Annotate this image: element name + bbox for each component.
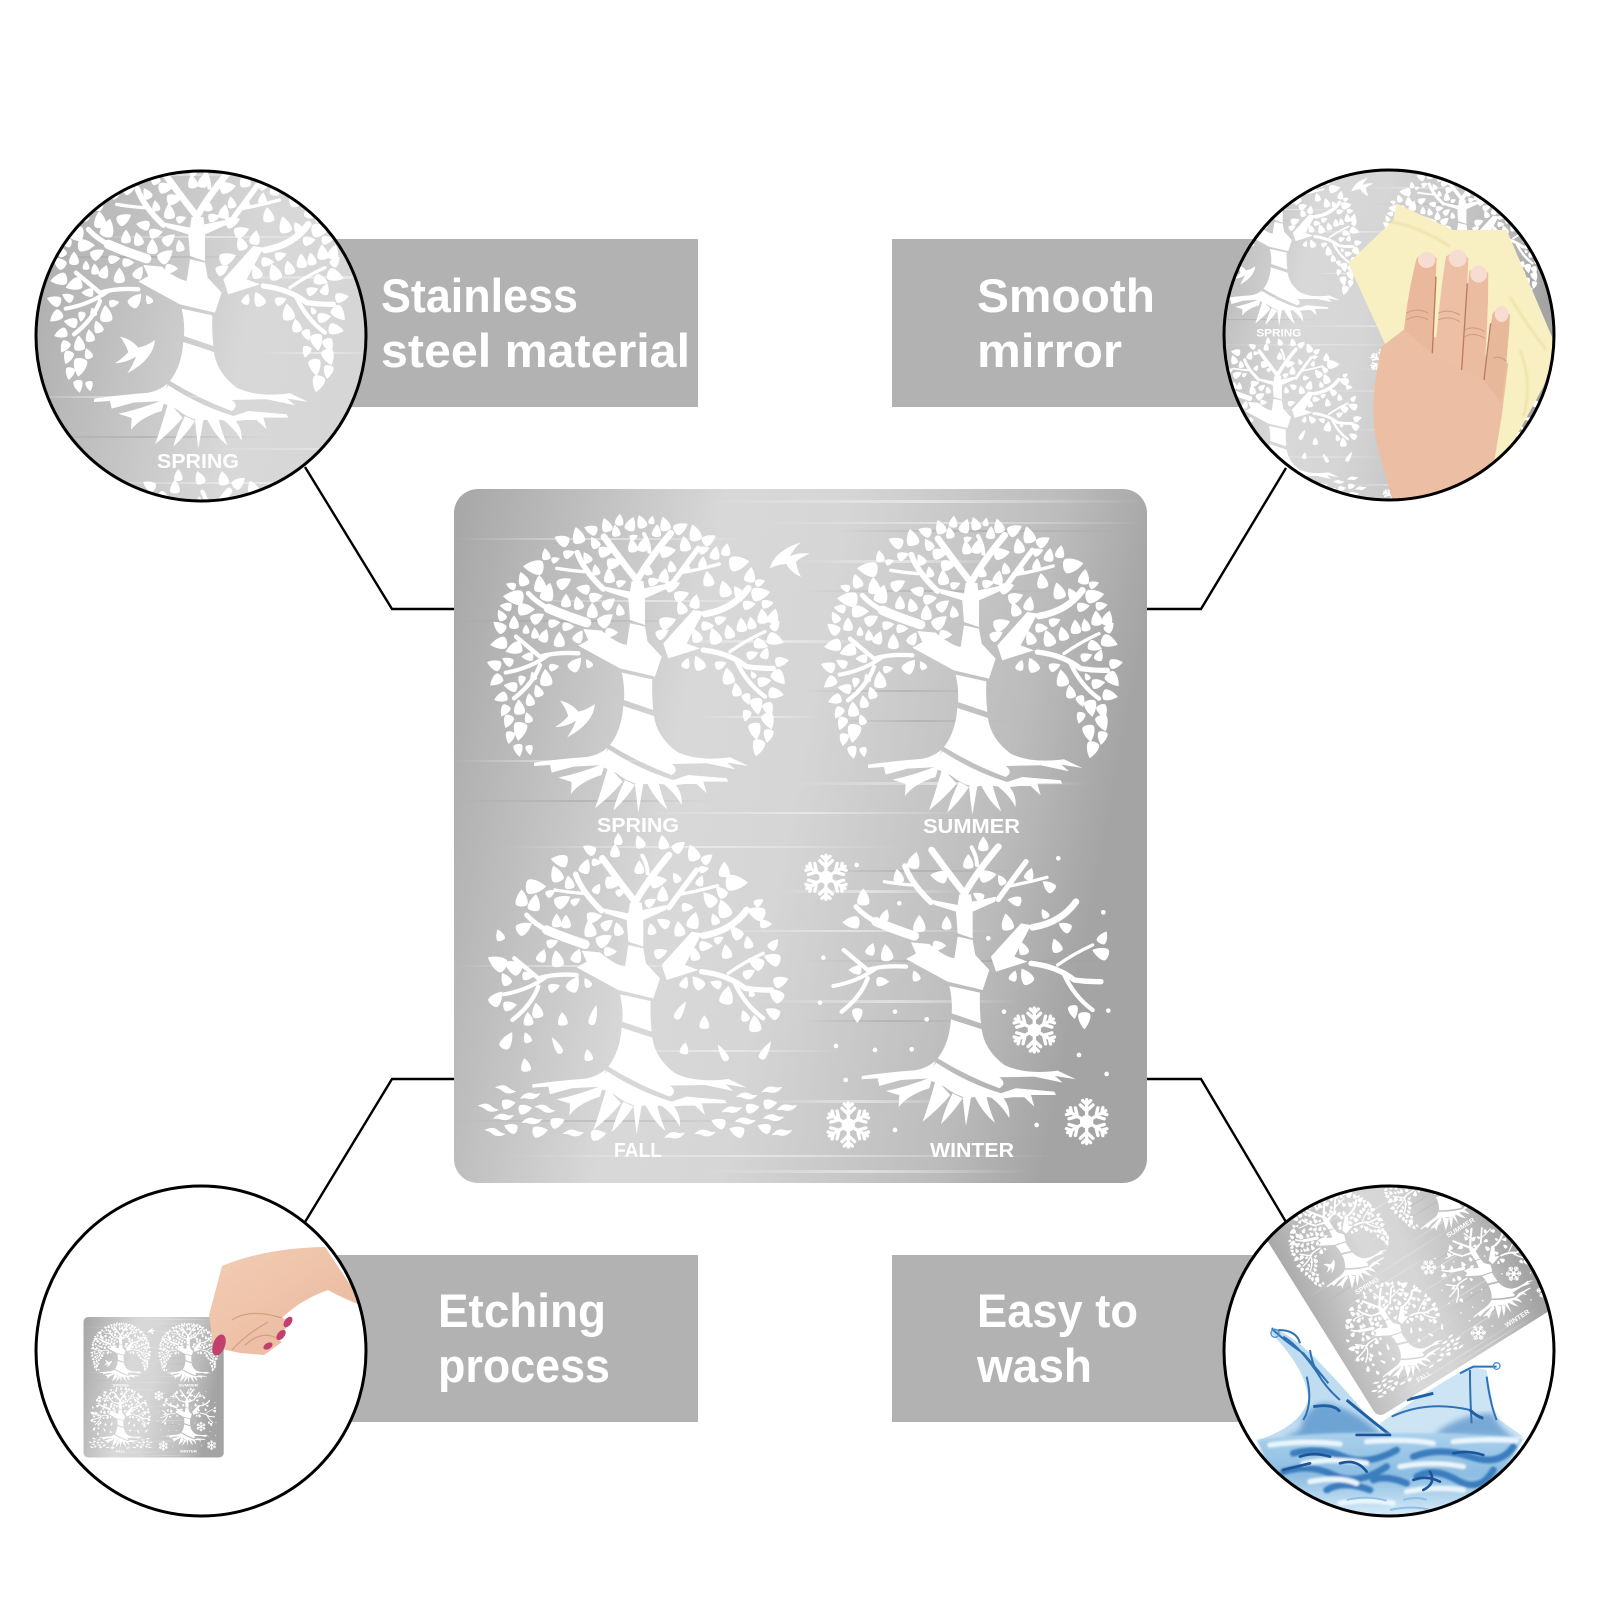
heading: stainless steel material: steel material [381, 324, 690, 377]
panel: circle hand holding etched plate [36, 1186, 366, 1516]
callout connector: easy to wash [1147, 1079, 1286, 1222]
callout connector: smooth mirror [1147, 468, 1286, 609]
callout connector: etching process [305, 1079, 454, 1222]
heading: easy to wash: Easy to [977, 1284, 1138, 1337]
heading: easy to wash [976, 1284, 1138, 1392]
tree: winter [804, 836, 1111, 1147]
season labels on plate: SUMMER [923, 816, 1021, 838]
towel and hand [1348, 203, 1553, 503]
tree: summer [819, 515, 1124, 815]
snow dots [818, 856, 1111, 1132]
season labels on plate: FALL [614, 1140, 662, 1162]
panel: stainless steel label [300, 239, 698, 407]
heading: etching process: Etching [438, 1284, 606, 1337]
icon: bird flying top right [769, 538, 811, 578]
heading: stainless steel material: Stainless [381, 269, 578, 322]
panel: circle hand wiping plate with towel [1222, 168, 1556, 502]
panel: central steel stencil plate [454, 489, 1147, 1183]
panel: smooth mirror label [892, 239, 1292, 407]
season labels on plate: SPRING [597, 815, 679, 837]
water surface [1257, 1433, 1523, 1517]
heading: etching process: process [438, 1339, 610, 1392]
mini plate [84, 1317, 224, 1458]
plate background [454, 489, 1147, 1183]
fallen leaves on the ground [477, 1083, 798, 1142]
panel: easy to wash label [892, 1255, 1292, 1422]
panel: circle zoom of spring tree [34, 170, 368, 502]
rotated stencil plate [1268, 1188, 1548, 1415]
heading: stainless steel material [381, 269, 690, 377]
heading: smooth mirror [977, 269, 1155, 377]
icon: bird inside spring tree [555, 701, 595, 737]
tree: fall [477, 833, 798, 1142]
heading: smooth mirror: Smooth [977, 269, 1155, 322]
heading: easy to wash: wash [976, 1339, 1092, 1392]
season labels on plate [597, 815, 1021, 1162]
heading: etching process [438, 1284, 610, 1392]
panel: etching process label [300, 1255, 698, 1422]
tree: spring [485, 513, 811, 813]
icons: snowflakes [804, 855, 1109, 1147]
callout connector: stainless steel [305, 467, 454, 609]
heading: smooth mirror: mirror [977, 324, 1122, 377]
panel: circle plate splashing in water [1222, 1184, 1556, 1518]
water splash crowns [1257, 1327, 1523, 1441]
hand [209, 1247, 365, 1357]
season labels on plate: WINTER [930, 1140, 1015, 1162]
